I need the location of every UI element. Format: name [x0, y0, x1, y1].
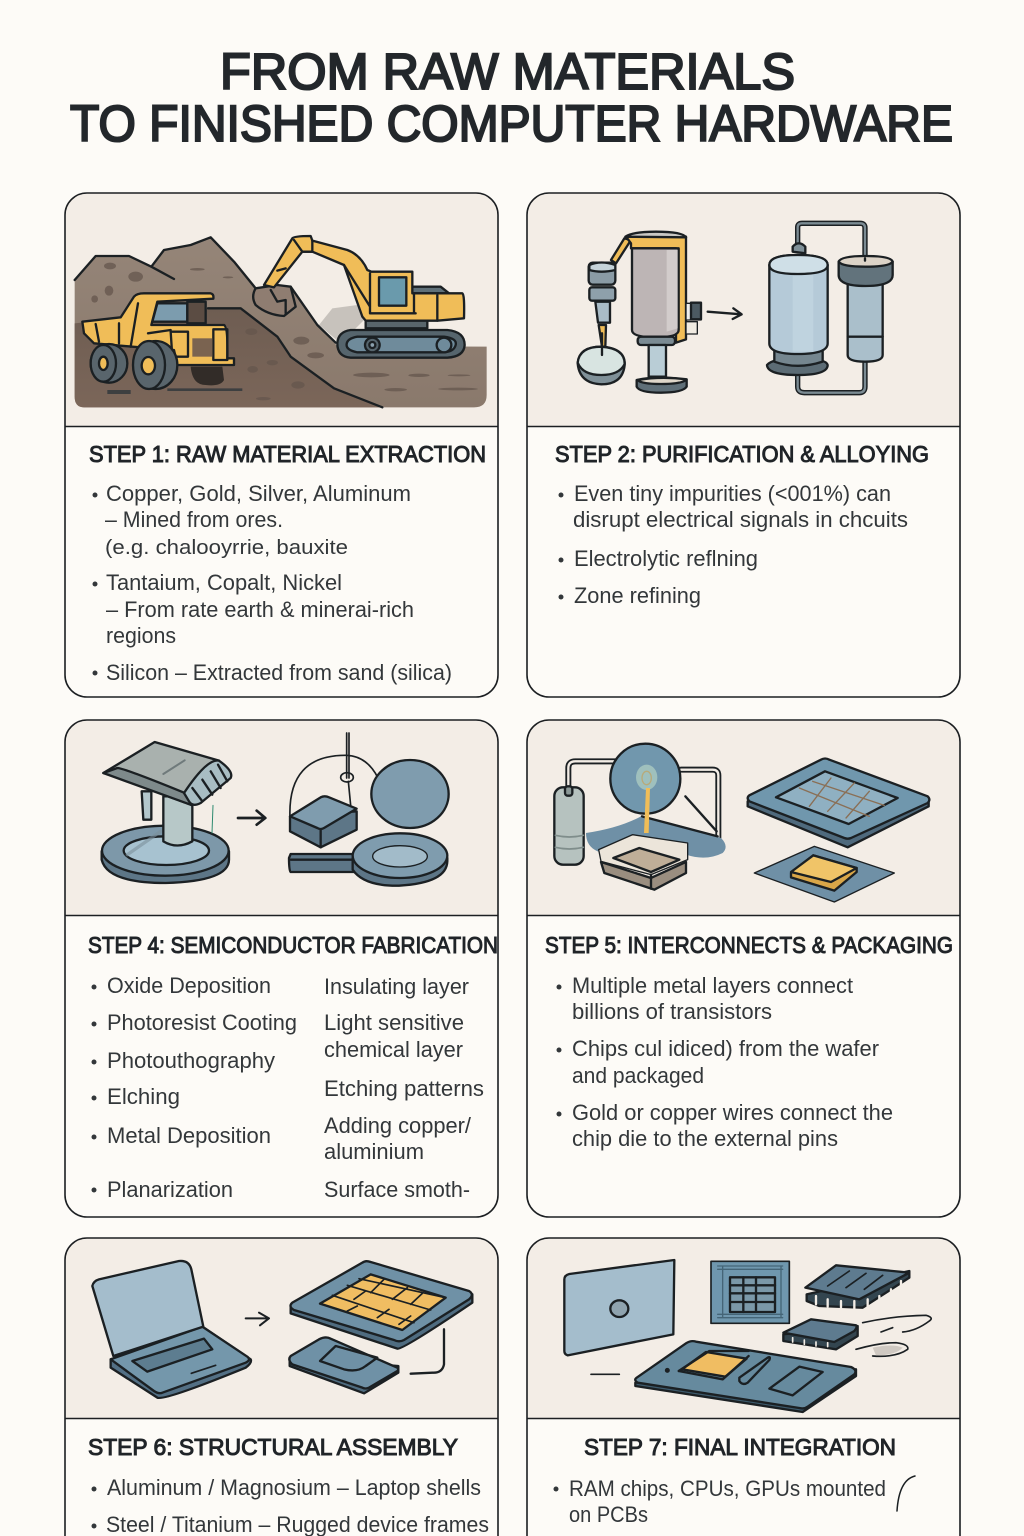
illustration: display, chips and motherboard	[564, 1260, 931, 1412]
step 4 process list	[92, 973, 484, 1202]
panel: step 6 structural assembly	[65, 1238, 498, 1536]
step 1 bullet list: Silicon – Extracted from sand (silica)	[106, 660, 452, 685]
step 4 process list: Etching patterns	[324, 1076, 484, 1101]
panel: step 2 purification and alloying	[527, 193, 960, 697]
step 7 bullet list: on PCBs	[569, 1502, 648, 1527]
step 4 process list: Photouthography	[107, 1048, 275, 1073]
step 5 bullet list: billions of transistors	[572, 999, 772, 1024]
step 4 process list: Metal Deposition	[107, 1123, 271, 1148]
step 7 bullet list: RAM chips, CPUs, GPUs mounted	[569, 1476, 886, 1501]
step 1 bullet list: Copper, Gold, Silver, Aluminum	[106, 481, 411, 506]
excavator	[264, 236, 465, 358]
step 2 bullet list: Even tiny impurities (<001%) can	[574, 481, 891, 506]
illustration: mining truck and excavator	[75, 236, 487, 407]
dump truck	[82, 293, 242, 394]
step 2 bullet list: Electrolytic reflning	[574, 546, 758, 571]
step 5 heading: STEP 5: INTERCONNECTS & PACKAGING	[545, 932, 953, 958]
step 5 bullet list: Gold or copper wires connect the	[572, 1100, 893, 1125]
step 4 process list: Adding copper/	[324, 1113, 472, 1138]
step 4 process list: Photoresist Cooting	[107, 1010, 297, 1035]
title: FROM RAW MATERIALS	[220, 43, 795, 100]
hand-drawn stroke mark	[897, 1476, 915, 1511]
panel: step 4 semiconductor fabrication	[65, 720, 498, 1217]
step 4 process list: Elching	[107, 1084, 180, 1109]
step 4 process list: Insulating layer	[324, 974, 469, 999]
step 1 bullet list: – Mined from ores.	[105, 507, 283, 532]
step 4 process list: Planarization	[107, 1177, 233, 1202]
illustration: wire bonding and chip package	[554, 744, 929, 902]
step 6 heading: STEP 6: STRUCTURAL ASSEMBLY	[88, 1434, 458, 1460]
step 1 bullet list	[92, 481, 452, 685]
step 4 heading: STEP 4: SEMICONDUCTOR FABRICATION	[88, 932, 498, 958]
step 5 bullet list	[556, 973, 893, 1151]
step 2 bullet list: disrupt electrical signals in chcuits	[573, 507, 908, 532]
step 5 bullet list: and packaged	[572, 1063, 704, 1088]
step 5 bullet list: Chips cul idiced) from the wafer	[572, 1036, 879, 1061]
step 1 bullet list: regions	[106, 623, 176, 648]
step 2 heading: STEP 2: PURIFICATION & ALLOYING	[555, 441, 929, 467]
step 5 bullet list: Multiple metal layers connect	[572, 973, 853, 998]
step 6 bullet list	[92, 1475, 489, 1536]
step 2 bullet list: Zone refining	[574, 583, 701, 608]
step 7 heading: STEP 7: FINAL INTEGRATION	[584, 1434, 896, 1460]
illustration: refining apparatus	[578, 223, 893, 393]
illustration: laptop and chassis parts	[92, 1261, 472, 1398]
step 6 bullet list: Aluminum / Magnosium – Laptop shells	[107, 1475, 481, 1500]
step 1 bullet list: – From rate earth & minerai-rich	[106, 597, 414, 622]
step 1 heading: STEP 1: RAW MATERIAL EXTRACTION	[89, 441, 486, 467]
step 1 bullet list: (e.g. chalooyrrie, bauxite	[105, 537, 348, 559]
step 4 process list: Light sensitive	[324, 1010, 464, 1035]
title	[70, 43, 953, 152]
step 4 process list: Surface smoth-	[324, 1177, 470, 1202]
illustration: ingot puller and wafers	[102, 733, 449, 886]
step 1 bullet list: Tantaium, Copalt, Nickel	[106, 570, 342, 595]
title: TO FINISHED COMPUTER HARDWARE	[70, 95, 953, 152]
step 5 bullet list: chip die to the external pins	[572, 1126, 838, 1151]
step 4 process list: chemical layer	[324, 1037, 463, 1062]
step 4 process list: Oxide Deposition	[107, 973, 271, 998]
panel: step 7 final integration	[527, 1238, 960, 1536]
panel: step 5 interconnects and packaging	[527, 720, 960, 1217]
step 7 bullet list	[554, 1476, 886, 1527]
panel: step 1 raw material extraction	[65, 193, 498, 697]
step 4 process list: aluminium	[324, 1139, 424, 1164]
step 2 bullet list	[558, 481, 908, 608]
